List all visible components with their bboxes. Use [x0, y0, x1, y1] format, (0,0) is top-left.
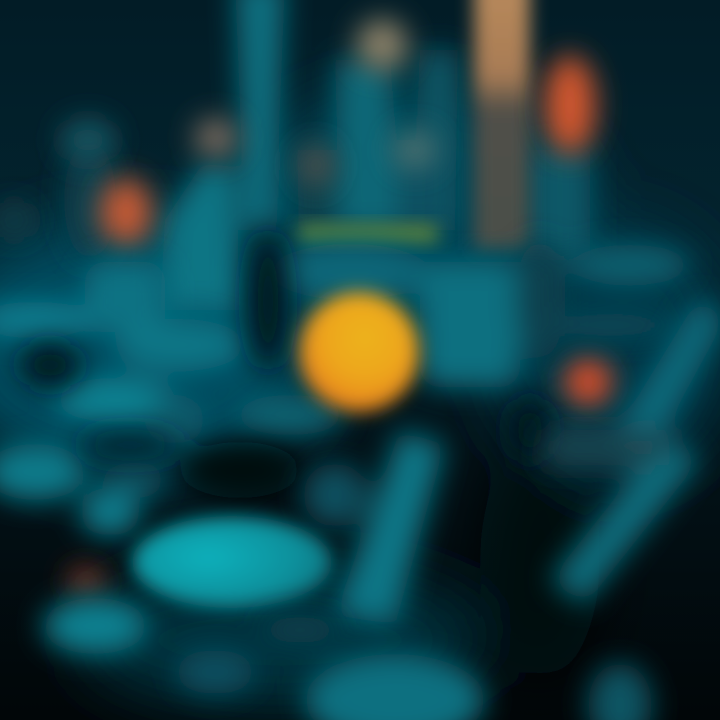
dark gaps — [20, 230, 552, 498]
lower small pods — [43, 598, 652, 720]
orange accents — [68, 55, 612, 597]
tall orange tower — [474, 0, 530, 250]
lower centre shard — [303, 430, 445, 625]
upper towers — [64, 0, 590, 310]
right diagonal shards — [540, 295, 720, 605]
large teal pod — [132, 516, 332, 608]
central teal mass — [0, 240, 690, 536]
tower caps — [0, 19, 437, 238]
golden sphere — [299, 292, 419, 412]
green bar — [298, 224, 438, 244]
